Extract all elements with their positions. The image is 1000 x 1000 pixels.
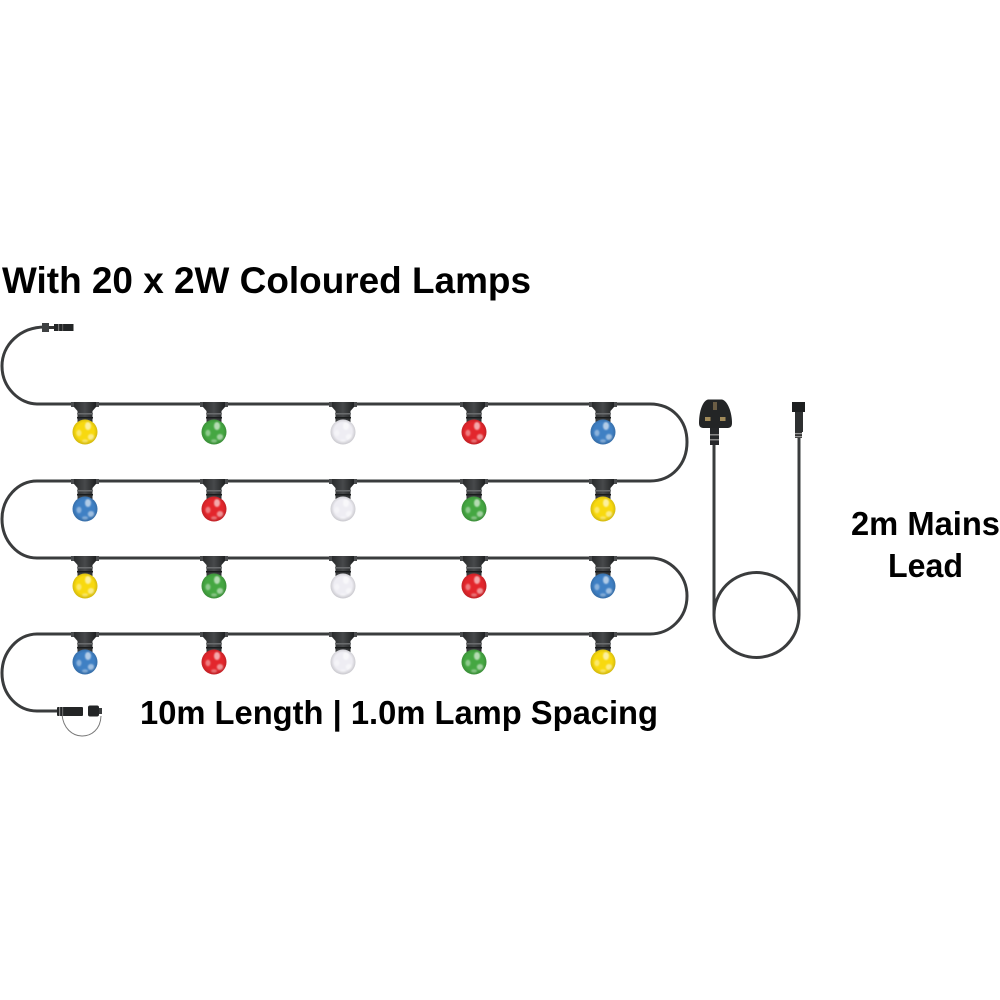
- lamp row 4: [71, 632, 617, 674]
- lamp: blue: [589, 556, 617, 598]
- label: mains lead: 2m Mains: [851, 505, 1000, 542]
- lamp: blue: [71, 479, 99, 522]
- lamp: red: [200, 479, 228, 522]
- lamp row 3: [71, 556, 617, 598]
- lamp: yellow: [589, 632, 617, 674]
- label: mains lead: Lead: [888, 547, 963, 584]
- lamp: yellow: [71, 402, 99, 444]
- lamp row 2: [71, 479, 617, 522]
- icon: UK mains plug: [699, 400, 732, 445]
- lamp: white: [329, 556, 357, 598]
- lamp: white: [329, 402, 357, 444]
- lamp: red: [200, 632, 228, 674]
- lamp: green: [200, 556, 228, 598]
- lamp: green: [460, 632, 488, 674]
- title: With 20 x 2W Coloured Lamps: [2, 260, 531, 301]
- festoon cable: [2, 327, 687, 711]
- lamp: yellow: [589, 479, 617, 522]
- lamp: blue: [589, 402, 617, 444]
- lamp: green: [460, 479, 488, 522]
- input connector: [42, 323, 74, 332]
- label: length and spacing: 10m Length | 1.0m Lamp Spacing: [140, 694, 658, 731]
- lamp: white: [329, 479, 357, 522]
- lamp: blue: [71, 632, 99, 674]
- lamp row 1: [71, 402, 617, 444]
- label: mains lead: [851, 505, 1000, 584]
- icon: lead connector: [792, 402, 805, 438]
- lamp: green: [200, 402, 228, 444]
- lamp: yellow: [71, 556, 99, 598]
- mains lead cable: [714, 425, 799, 658]
- end cap connector: [57, 706, 102, 736]
- lamp: white: [329, 632, 357, 674]
- lamp: red: [460, 556, 488, 598]
- lamp: red: [460, 402, 488, 444]
